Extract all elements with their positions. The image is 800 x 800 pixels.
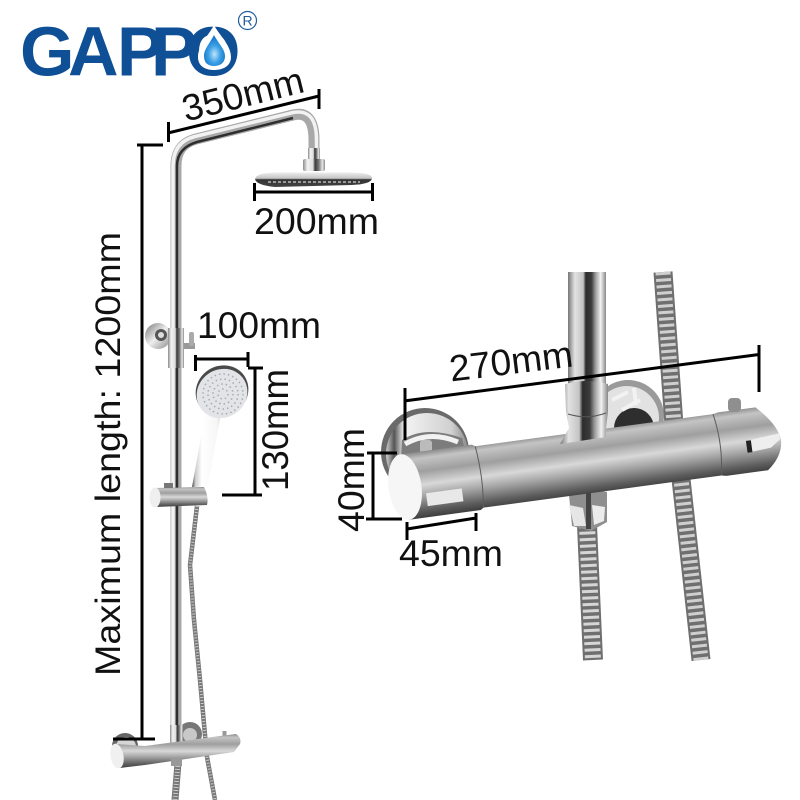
large riser pipe bbox=[568, 272, 606, 397]
outlet nut bbox=[569, 489, 607, 531]
valve body bbox=[384, 404, 785, 522]
dimension: 270mm: 270mm bbox=[447, 334, 575, 389]
dimension: 40mm bbox=[331, 428, 402, 532]
dimension: 200mm: 200mm bbox=[254, 201, 379, 242]
registered mark: R bbox=[242, 12, 253, 28]
dimension: 100mm: 100mm bbox=[197, 305, 321, 346]
slider clamp bbox=[150, 483, 208, 508]
riser pipe and arm bbox=[173, 112, 316, 742]
dimension: 130mm bbox=[222, 368, 296, 495]
top pin bbox=[728, 398, 741, 412]
dimension: 130mm: 130mm bbox=[255, 369, 296, 491]
right wall bracket bbox=[592, 380, 664, 452]
icon: water drop bbox=[198, 25, 231, 70]
dimension: 45mm bbox=[399, 513, 503, 574]
small thermostatic valve bbox=[108, 725, 240, 769]
left wall bracket bbox=[381, 408, 470, 496]
registered mark bbox=[238, 12, 256, 30]
full shower set bbox=[108, 112, 372, 800]
enlarged valve detail bbox=[381, 272, 785, 660]
left collar highlight bbox=[426, 488, 463, 506]
wall bracket: small valve bbox=[112, 722, 202, 759]
slider collar bbox=[560, 381, 608, 444]
wall bracket and sliding sleeve bbox=[145, 323, 195, 368]
dimension: 200mm bbox=[254, 183, 379, 242]
dimension: 45mm: 45mm bbox=[399, 533, 503, 574]
valve right end notch bbox=[745, 433, 781, 453]
hose: small view bbox=[175, 506, 215, 800]
braided hose bbox=[663, 272, 701, 660]
logo: GAPPO: GAPPO bbox=[20, 12, 240, 90]
overhead shower head bbox=[255, 148, 372, 187]
dimension: 100mm bbox=[195, 305, 321, 371]
hand shower bbox=[186, 355, 258, 487]
lower outlet hose bbox=[587, 525, 593, 660]
dimension: 40mm: 40mm bbox=[331, 428, 372, 532]
dimension: 350mm: 350mm bbox=[178, 60, 308, 129]
dimension: maximum length 1200mm: Maximum length: 1200mm bbox=[89, 232, 128, 676]
temperature knob end cap bbox=[384, 452, 426, 522]
dimension: 270mm bbox=[404, 334, 759, 440]
dimension: maximum length 1200mm bbox=[89, 145, 163, 739]
